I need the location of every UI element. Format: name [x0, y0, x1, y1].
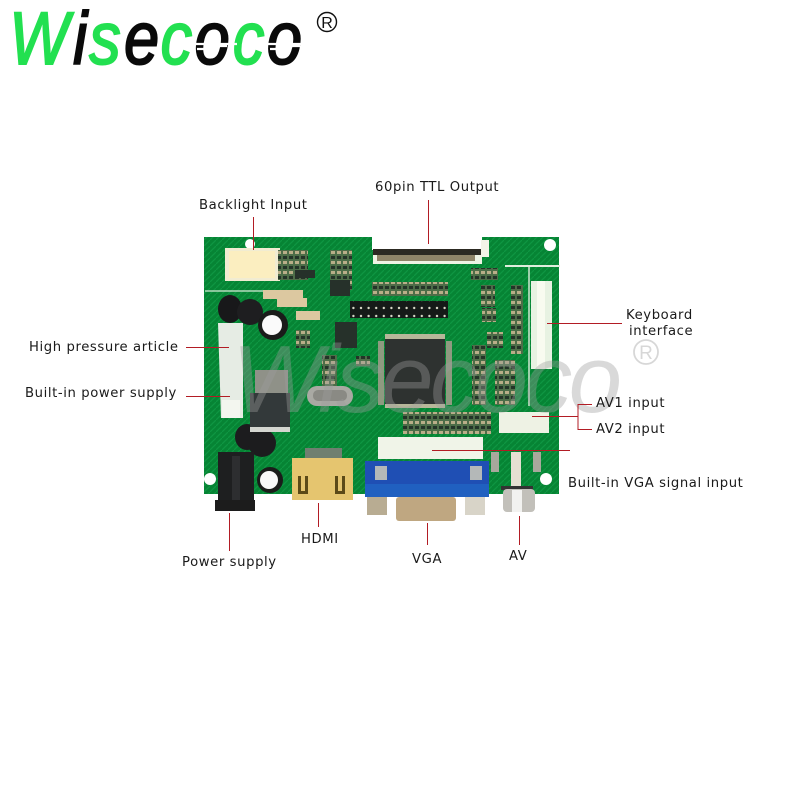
label: AV1 input — [578, 396, 665, 416]
pin header — [350, 301, 448, 318]
label: Keyboard interface — [547, 308, 693, 339]
label: AV1 input: AV1 input — [596, 396, 665, 411]
label: AV — [509, 516, 527, 564]
label: VGA: VGA — [412, 552, 442, 567]
HDMI port — [292, 448, 353, 500]
VGA white header — [378, 437, 483, 459]
label: VGA — [412, 523, 442, 567]
board PCB — [204, 237, 559, 494]
small components row — [263, 250, 523, 405]
label: 60pin TTL Output: 60pin TTL Output — [375, 180, 499, 195]
label: AV2 input — [532, 416, 665, 437]
AV white connector — [499, 412, 549, 433]
watermark: Wisecoco: Wisecoco — [232, 326, 622, 433]
VGA port — [365, 461, 489, 521]
backlight connector — [225, 248, 280, 281]
white side connectors — [531, 281, 552, 369]
watermark: Wisecoco: R — [639, 343, 653, 364]
label: 60pin TTL Output — [375, 180, 499, 244]
label: High pressure article: High pressure article — [29, 340, 179, 355]
label: Power supply — [182, 513, 277, 570]
AV RCA port — [491, 452, 541, 512]
dark capacitors/chokes — [218, 295, 288, 340]
label: Backlight Input — [199, 198, 308, 250]
logo: Wisecoco: R — [321, 15, 333, 32]
logo: Wisecoco — [9, 0, 336, 80]
label: Built-in VGA signal input: Built-in VGA signal input — [568, 476, 743, 491]
label: Built-in power supply: Built-in power supply — [25, 386, 177, 401]
TTL FPC connector — [373, 240, 489, 264]
component banks — [403, 412, 491, 434]
label: AV: AV — [509, 549, 527, 564]
label: HDMI — [301, 503, 339, 547]
label: Power supply: Power supply — [182, 555, 277, 570]
power jack — [215, 452, 255, 511]
label: AV2 input: AV2 input — [596, 422, 665, 437]
label: Keyboard interface: interface — [629, 324, 693, 339]
label: Keyboard interface: Keyboard — [626, 308, 693, 323]
main chip — [378, 334, 452, 408]
label: HDMI: HDMI — [301, 532, 339, 547]
LCD controller board — [204, 237, 560, 521]
crystal — [307, 386, 353, 406]
label: Backlight Input: Backlight Input — [199, 198, 308, 213]
voltage regulator — [250, 370, 290, 432]
